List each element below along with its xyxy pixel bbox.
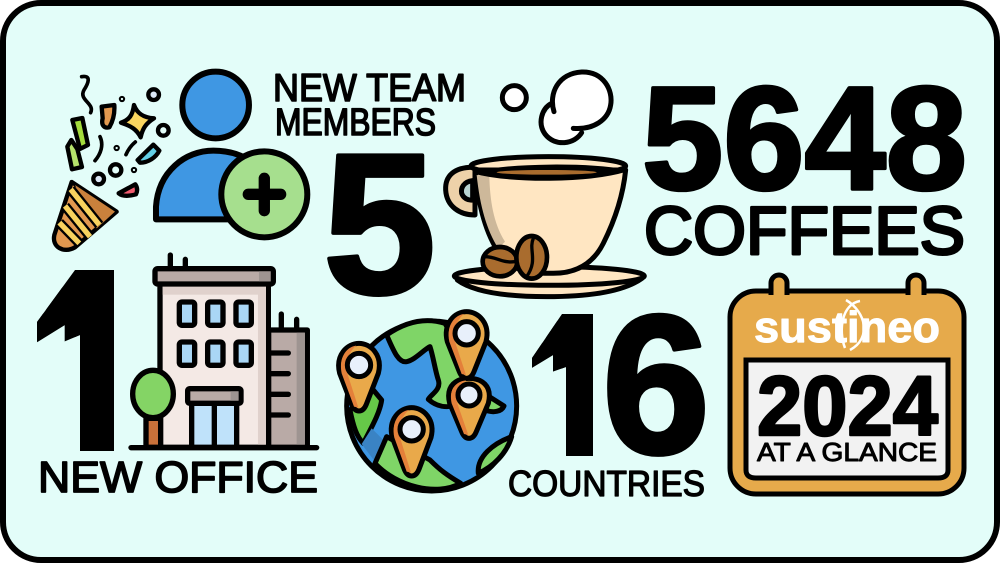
calendar body xyxy=(730,291,964,494)
icon: calendar badge xyxy=(730,275,964,494)
pin: east xyxy=(449,378,489,438)
number: 5 team members: 5 xyxy=(323,113,436,336)
pin: south xyxy=(391,408,432,476)
icon: office building with tree xyxy=(131,255,317,448)
icon: globe with location pins xyxy=(339,312,517,491)
number: 1 new office: 1 xyxy=(16,224,156,503)
year: 2024: 2024 xyxy=(757,359,938,453)
label: coffees: COFFEES xyxy=(644,193,965,269)
heading: new team members xyxy=(273,67,466,144)
icon: party popper xyxy=(54,76,169,250)
icon: steam clouds xyxy=(502,71,612,144)
label: new office: NEW OFFICE xyxy=(38,453,318,502)
calendar page xyxy=(746,360,948,478)
label: countries: COUNTRIES xyxy=(508,463,705,504)
number: 16 countries: 1 xyxy=(513,275,628,498)
number: 16 countries: 6 xyxy=(602,274,710,495)
pin: north xyxy=(446,312,487,378)
caption: at a glance: AT A GLANCE xyxy=(757,437,937,467)
pin: west xyxy=(339,343,379,411)
logo swirl xyxy=(842,300,864,350)
logo text: sustineo: sustineo xyxy=(754,303,940,352)
calendar pegs xyxy=(771,275,924,295)
icon: new team member person with plus xyxy=(156,72,307,237)
number: 16 countries xyxy=(532,312,705,457)
heading: new team members: MEMBERS xyxy=(275,102,436,144)
number: 5648 coffees: 5648 xyxy=(642,57,967,221)
heading: new team members: NEW TEAM xyxy=(273,67,466,110)
icon: coffee cup with beans xyxy=(446,157,644,297)
